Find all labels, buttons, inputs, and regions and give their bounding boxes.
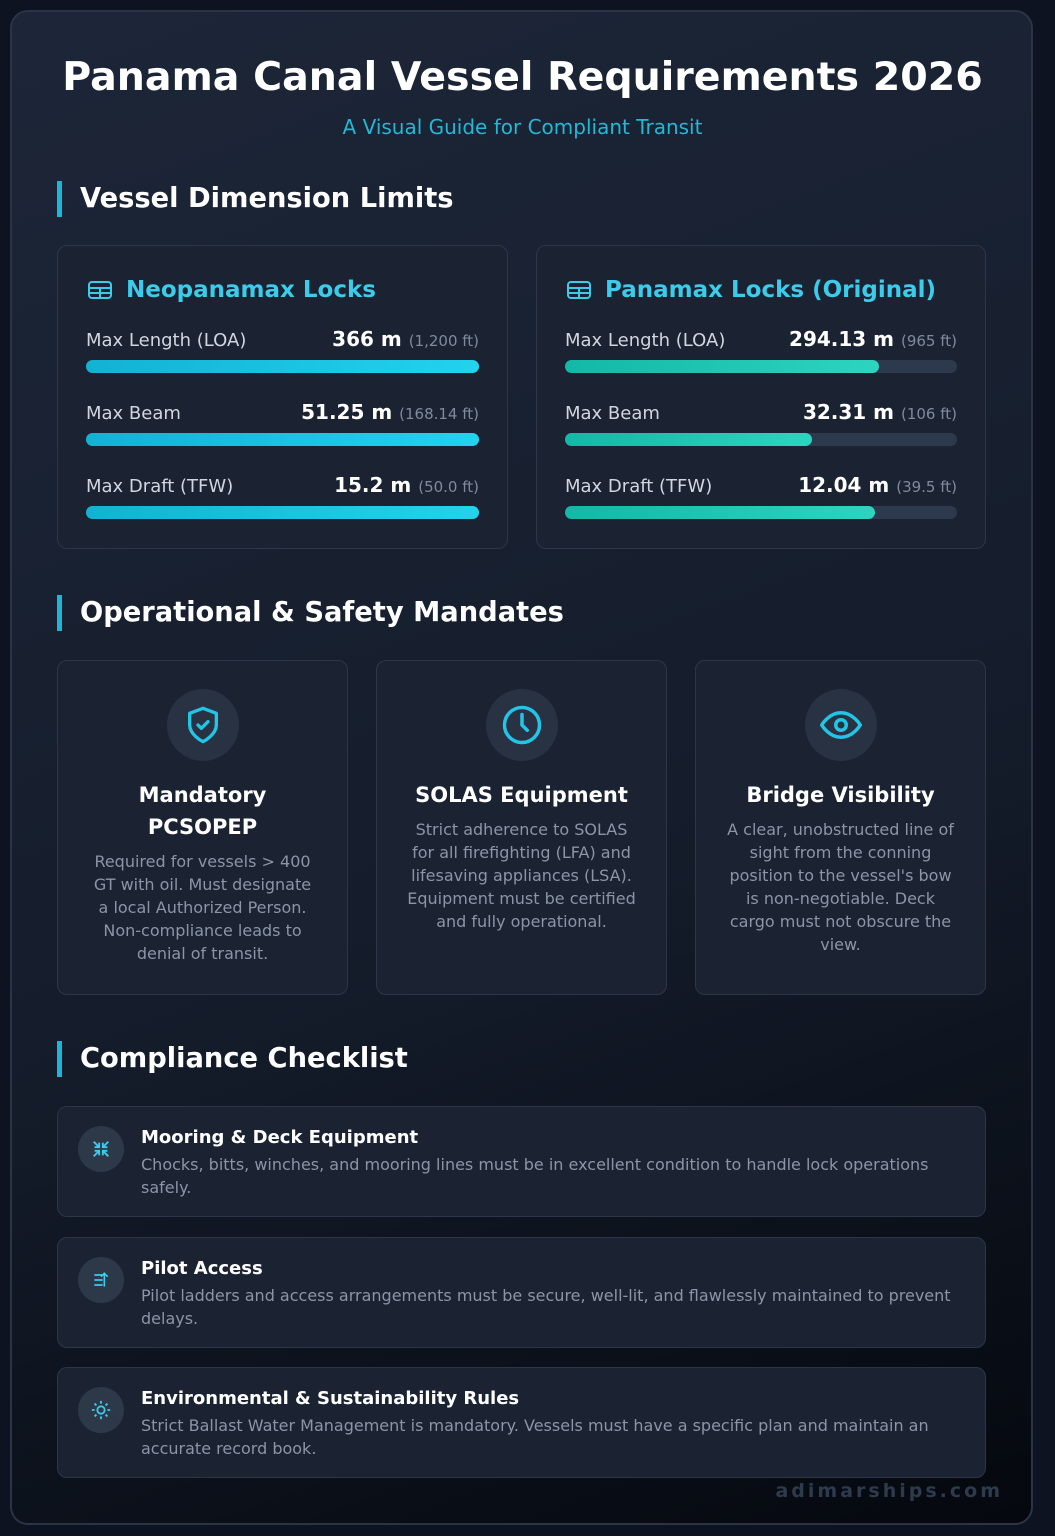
row: max beam [86, 400, 479, 446]
icon: clock [486, 689, 558, 761]
row: max beam: 51.25 m (168.14 ft) [301, 400, 479, 424]
panel: solas [376, 660, 667, 995]
panel: pcsopep [57, 660, 348, 995]
row: max draft: Max Draft (TFW) [86, 476, 233, 497]
title: Panama Canal Vessel Requirements 2026 [62, 54, 983, 100]
subtitle: A Visual Guide for Compliant Transit [343, 115, 702, 139]
icon: shield [166, 689, 238, 761]
panel: panamax locks [536, 245, 986, 549]
heading: compliance checklist: Compliance Checklist [80, 1043, 408, 1074]
row: max length [565, 327, 957, 373]
panel: bridge visibility: A clear, unobstructed line of sight from the conning position to the vessel's bow is non-negotiable. Deck cargo must not obscure the view. [727, 820, 954, 954]
row: max draft [86, 473, 479, 519]
icon: arrows [78, 1126, 124, 1172]
row: max beam [565, 400, 957, 446]
item: environmental [57, 1367, 986, 1478]
panel: pcsopep: Required for vessels > 400 GT with oil. Must designate a local Authorized Person. Non-compliance leads to denial of transit. [94, 852, 311, 963]
icon: sun [78, 1387, 124, 1433]
item: mooring: Mooring & Deck Equipment [141, 1127, 418, 1148]
row: max length: 294.13 m (965 ft) [789, 327, 957, 351]
item: environmental: Environmental & Sustainability Rules [141, 1388, 519, 1409]
row: max draft: 15.2 m (50.0 ft) [334, 473, 479, 497]
item: environmental: Strict Ballast Water Management is mandatory. Vessels must have a specific plan and maintain an accurate record book. [141, 1416, 929, 1458]
panel: neopanamax locks [57, 245, 508, 549]
item: pilot access: Pilot Access [141, 1258, 263, 1279]
panel: bridge visibility [695, 660, 986, 995]
row: max length: Max Length (LOA) [565, 330, 725, 351]
row: max length: Max Length (LOA) [86, 330, 246, 351]
watermark: adimarships.com [775, 1480, 1003, 1502]
row: max length [86, 327, 479, 373]
heading: operational & safety mandates: Operational & Safety Mandates [80, 597, 564, 628]
card title: neopanamax: Neopanamax Locks [126, 277, 376, 303]
row: max draft [565, 473, 957, 519]
icon: ladder [78, 1257, 124, 1303]
item: mooring: Chocks, bitts, winches, and mooring lines must be in excellent condition to handle lock operations safely. [141, 1155, 929, 1197]
panel: bridge visibility: Bridge Visibility [746, 783, 935, 807]
row: max beam: Max Beam [565, 403, 660, 424]
row: max draft: Max Draft (TFW) [565, 476, 712, 497]
panel: pcsopep: Mandatory [139, 783, 266, 807]
panel: solas: SOLAS Equipment [415, 783, 628, 807]
item: mooring [57, 1106, 986, 1217]
heading: vessel dimension limits: Vessel Dimension Limits [80, 183, 454, 214]
item: pilot access [57, 1237, 986, 1348]
row: max beam: 32.31 m (106 ft) [803, 400, 957, 424]
panel: solas: Strict adherence to SOLAS for all firefighting (LFA) and lifesaving appliances (LSA). Equipment must be certified and fully operational. [407, 820, 636, 931]
panel: pcsopep: PCSOPEP [148, 815, 257, 839]
card title: panamax: Panamax Locks (Original) [605, 277, 936, 303]
row: max beam: Max Beam [86, 403, 181, 424]
item: pilot access: Pilot ladders and access arrangements must be secure, well-lit, and flawlessly maintained to prevent delays. [141, 1286, 951, 1328]
row: max length: 366 m (1,200 ft) [332, 327, 479, 351]
icon: eye [804, 689, 876, 761]
row: max draft: 12.04 m (39.5 ft) [798, 473, 957, 497]
